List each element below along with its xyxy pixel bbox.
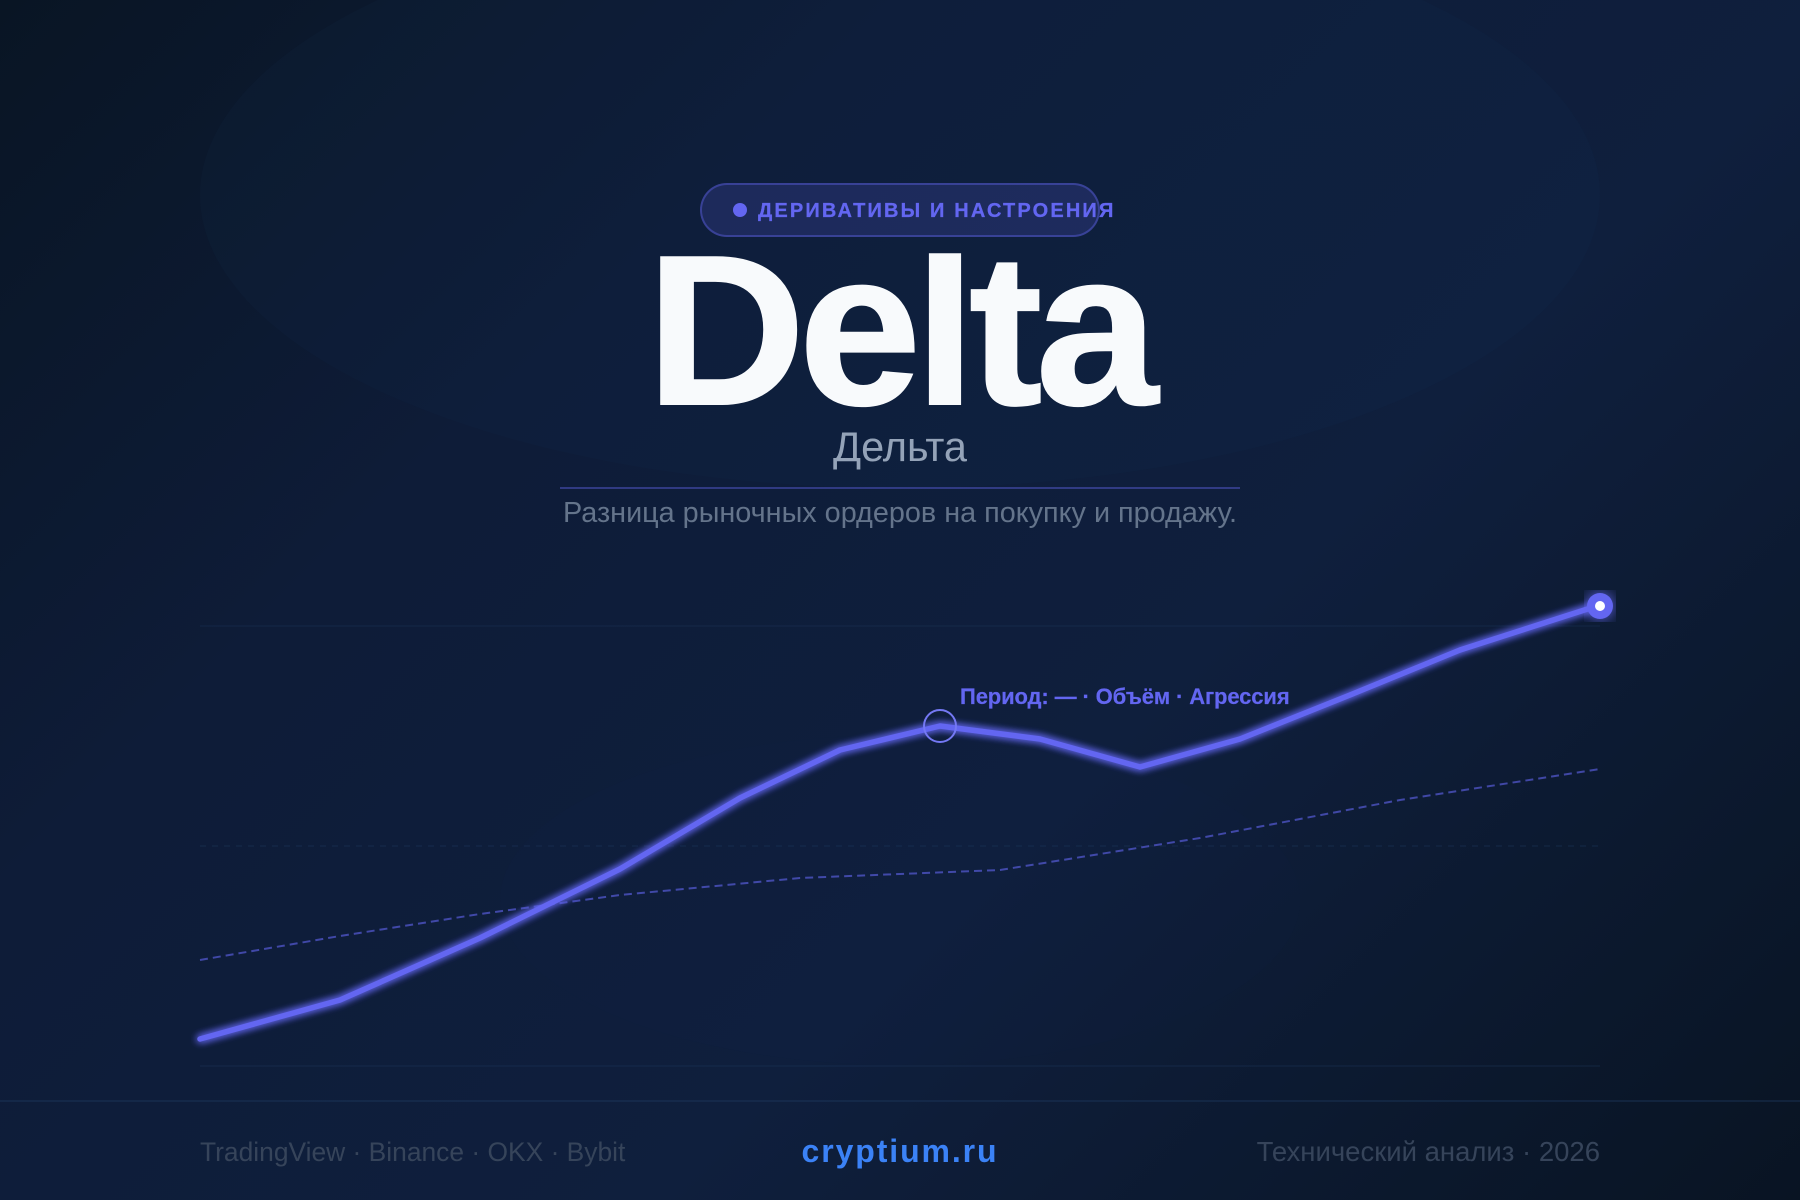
title: D (646, 211, 799, 450)
footer (0, 1100, 1800, 1200)
footer brand: cryptium.ru (802, 1133, 998, 1169)
badge pill (700, 183, 1100, 237)
title: e a (799, 205, 1152, 451)
title: l (915, 217, 969, 448)
badge dot (733, 203, 747, 217)
main delta line (200, 605, 1600, 1039)
title (646, 205, 1160, 451)
end marker (1587, 593, 1613, 619)
peak marker (924, 710, 956, 742)
dashed comparison line (200, 769, 1600, 960)
badge text: ДЕРИВАТИВЫ И НАСТРОЕНИЯ (758, 200, 1115, 222)
divider (560, 487, 1240, 489)
footer topic: Технический анализ · 2026 (1257, 1136, 1600, 1167)
description: Разница рыночных ордеров на покупку и продажу. (563, 497, 1237, 529)
title: t (969, 209, 1036, 450)
subtitle: Дельта (833, 423, 967, 470)
footer sources: TradingView · Binance · OKX · Bybit (200, 1137, 625, 1167)
chart annotation: Период: — · Объём · Агрессия (960, 684, 1290, 709)
